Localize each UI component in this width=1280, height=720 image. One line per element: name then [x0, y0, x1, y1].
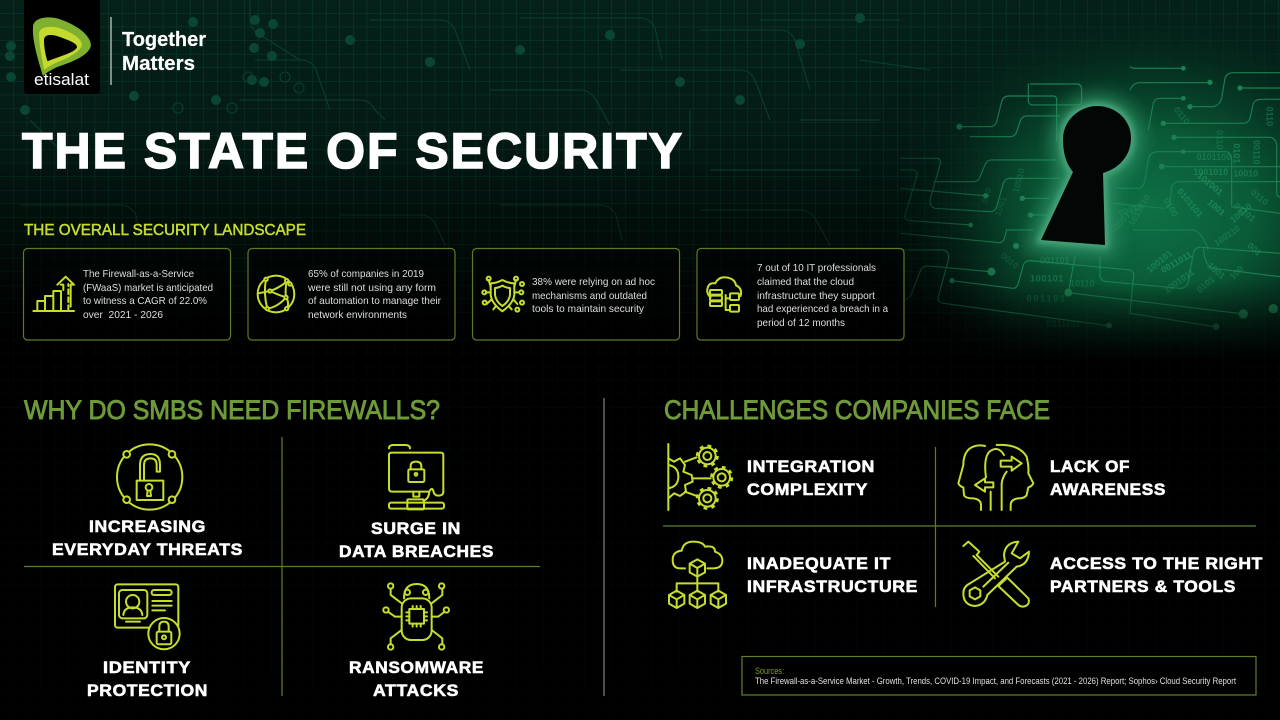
label: IDENTITY: [103, 659, 191, 677]
heading: challenges companies face: CHALLENGES COMPANIES FACE: [664, 395, 1050, 425]
binary digits texture: 0110: [1249, 187, 1270, 207]
panel: cloud breach stat: [697, 248, 904, 340]
binary digits texture: 001: [1245, 241, 1263, 258]
keyhole: [1041, 106, 1131, 245]
label: [339, 520, 494, 561]
text: FWaaS: (FWaaS) market is anticipated: [83, 282, 213, 294]
text: FWaaS: [83, 268, 213, 321]
binary digits texture: 010: [979, 186, 994, 204]
binary digits texture: 1001010: [1193, 167, 1228, 177]
background: dark circuit board with keyhole glow: [0, 0, 1280, 506]
text: ad hoc: tools to maintain security: [532, 303, 645, 315]
label: [1050, 555, 1263, 596]
item: integration complexity: [668, 444, 875, 510]
sources box: Sources:: [755, 666, 784, 676]
label: COMPLEXITY: [747, 481, 868, 499]
text: FWaaS: to witness a CAGR of 22.0%: [83, 295, 207, 307]
text: cloud breach: period of 12 months: [757, 317, 845, 329]
label: DATA BREACHES: [339, 543, 494, 561]
title: THE STATE OF SECURITY: [22, 123, 684, 179]
panel: automation stat: [248, 248, 455, 340]
binary digits texture: 0110: [1172, 105, 1192, 126]
icon: gears: [668, 444, 732, 510]
binary digits texture: 10010: [1233, 169, 1258, 179]
item: identity protection: [87, 584, 208, 700]
text: automation: 65% of companies in 2019: [308, 268, 424, 280]
text: cloud breach: had experienced a breach in a: [757, 303, 888, 315]
text: automation: [307, 268, 441, 321]
item: lack of awareness: [958, 445, 1166, 510]
binary digits texture: 0101: [1195, 274, 1217, 295]
icon: circuit shield: [482, 277, 524, 312]
label: INADEQUATE IT: [747, 555, 891, 573]
icon: cloud with cubes: [669, 542, 726, 608]
text: automation: network environments: [308, 309, 407, 321]
label: INTEGRATION: [747, 458, 875, 476]
text: ad hoc: mechanisms and outdated: [532, 290, 647, 302]
icon: growth chart: [33, 277, 74, 311]
binary digits texture: 10010: [1228, 201, 1254, 225]
icon: two heads with arrows: [958, 445, 1033, 510]
text: cloud breach: infrastructure they support: [757, 290, 875, 302]
sources box: [742, 656, 1256, 695]
binary digits texture: 001101: [1040, 255, 1069, 265]
panel: FWaaS stat: [24, 248, 230, 340]
binary digits texture: 10010: [1011, 167, 1027, 194]
icon: cloud storage: [707, 277, 741, 312]
text: cloud breach: 7 out of 10 IT professionals: [757, 262, 876, 274]
icon: chip bug: [383, 583, 449, 650]
item: increasing everyday threats: [52, 444, 243, 559]
heading: why SMBs need firewalls: WHY DO SMBS NEED FIREWALLS?: [24, 395, 440, 425]
text: cloud breach: [757, 262, 888, 329]
label: ATTACKS: [373, 682, 459, 700]
panel: ad hoc mechanisms stat: [472, 248, 680, 340]
text: FWaaS: The Firewall-as-a-Service: [83, 268, 194, 280]
keyhole circuit scene: [900, 6, 1280, 348]
item: ransomware attacks: [349, 583, 484, 700]
binary digits texture: 0101100: [1197, 152, 1231, 162]
item: surge in data breaches: [339, 445, 494, 561]
binary digits texture: 0101: [1231, 143, 1241, 163]
label: INCREASING: [89, 518, 206, 536]
text: automation: of automation to manage their: [308, 295, 441, 307]
logo: etisalat: [24, 0, 100, 94]
label: AWARENESS: [1050, 481, 1166, 499]
binary digits texture: 0110: [1265, 107, 1275, 126]
label: RANSOMWARE: [349, 659, 484, 677]
binary digits texture: 1001011: [1162, 267, 1196, 295]
text: ad hoc: [532, 276, 655, 315]
icon: ID card with lock: [115, 584, 180, 649]
label: [349, 659, 484, 700]
item: inadequate IT infrastructure: [669, 542, 918, 608]
binary digits texture: 100101: [1030, 274, 1063, 284]
label: PROTECTION: [87, 682, 208, 700]
label: LACK OF: [1050, 458, 1130, 476]
binary digits texture: 1001: [1205, 197, 1227, 218]
binary digits texture: 00110: [1251, 140, 1261, 164]
tagline: Matters: [122, 53, 195, 75]
binary digits texture: 1011010: [1126, 193, 1152, 228]
label: ACCESS TO THE RIGHT: [1050, 555, 1263, 573]
label: [87, 659, 208, 700]
label: [52, 518, 243, 559]
label: [1050, 458, 1166, 499]
tagline: Together: [122, 29, 206, 51]
logo wordmark: etisalat: [34, 70, 89, 89]
icon: open padlock: [117, 444, 182, 510]
binary digits texture: 100110: [1212, 223, 1242, 248]
text: automation: were still not using any form: [307, 282, 436, 294]
binary digits texture: 10110: [1070, 279, 1094, 289]
binary digits texture: 101001: [1195, 171, 1225, 197]
logo mark: [33, 17, 91, 76]
tagline: [122, 29, 206, 75]
binary digits texture: 00110: [1117, 201, 1144, 219]
label: [747, 458, 875, 499]
binary digits texture: 100: [1228, 264, 1245, 281]
binary digits texture: 0100: [1162, 196, 1180, 218]
logo divider: [110, 17, 112, 85]
heading: overall security landscape: THE OVERALL SECURITY LANDSCAPE: [24, 222, 306, 239]
label: SURGE IN: [371, 520, 461, 538]
binary digits texture: 0110: [1215, 130, 1225, 149]
binary digits texture: 100101: [1145, 248, 1174, 275]
text: cloud breach: claimed that the cloud: [757, 276, 854, 288]
label: [747, 555, 918, 596]
icon: network globe: [258, 276, 294, 312]
binary digits texture: 0011011: [1159, 249, 1194, 275]
icon: wrench and screwdriver: [963, 542, 1029, 607]
item: access to the right partners and tools: [963, 542, 1263, 607]
text: ad hoc: 38% were relying on ad hoc: [532, 276, 655, 288]
binary digits texture: 1001: [1205, 261, 1227, 281]
binary digits texture: [979, 105, 1275, 329]
icon: monitor with lock: [389, 445, 444, 509]
label: INFRASTRUCTURE: [747, 578, 918, 596]
text: FWaaS: over 2021 - 2026: [83, 309, 163, 321]
label: EVERYDAY THREATS: [52, 541, 243, 559]
binary digits texture: 0101101: [1175, 187, 1205, 219]
binary digits texture: 01101: [1232, 201, 1257, 224]
binary digits texture: 0010: [999, 251, 1020, 271]
binary digits texture: 001101: [1027, 294, 1065, 304]
label: PARTNERS & TOOLS: [1050, 578, 1236, 596]
binary digits texture: 0011101: [1047, 319, 1081, 329]
binary digits texture: 1001: [992, 195, 1009, 217]
binary digits texture: 0100110: [1108, 203, 1139, 235]
